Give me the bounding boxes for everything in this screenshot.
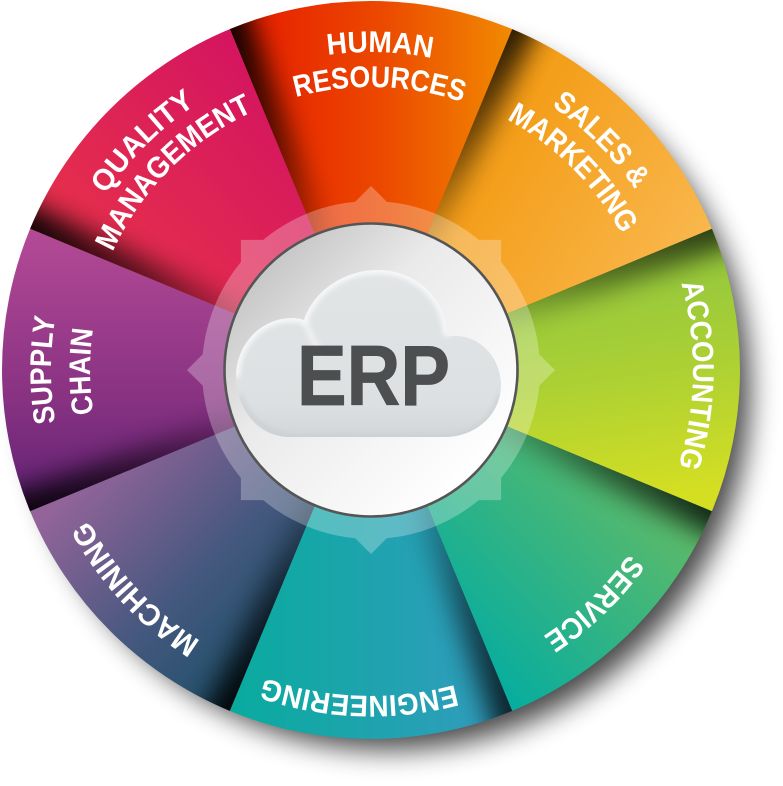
segment: accounting: ACCOUNTING <box>680 284 714 469</box>
segment: sales and marketing: SALES & <box>554 92 648 188</box>
segment: supply chain <box>2 228 234 512</box>
ERP label: ERP <box>297 329 450 424</box>
segment: service <box>428 426 712 711</box>
segment: supply chain: CHAIN <box>69 328 93 414</box>
center hub with cloud and ERP <box>224 224 518 516</box>
segment: machining <box>30 426 314 711</box>
segment: human resources: RESOURCES <box>292 66 466 100</box>
segment: supply chain: SUPPLY <box>30 315 54 424</box>
segment: sales and marketing <box>428 29 712 314</box>
segment: quality management: QUALITY <box>92 88 190 190</box>
translucent gear ring <box>187 186 555 554</box>
segment: quality management <box>30 29 314 314</box>
segment: engineering <box>230 506 512 739</box>
hub disc <box>224 224 518 516</box>
segment: accounting <box>508 228 740 512</box>
segment: human resources: HUMAN <box>327 31 434 58</box>
segment: sales and marketing: MARKETING <box>508 102 636 232</box>
segment: human resources <box>230 1 512 234</box>
icon: cloud <box>236 270 501 437</box>
segment: engineering: ENGINEERING <box>262 680 458 717</box>
segment: machining: MACHINING <box>74 523 199 658</box>
segment: service: SERVICE <box>544 557 643 652</box>
segment: quality management: MANAGEMENT <box>94 93 248 250</box>
